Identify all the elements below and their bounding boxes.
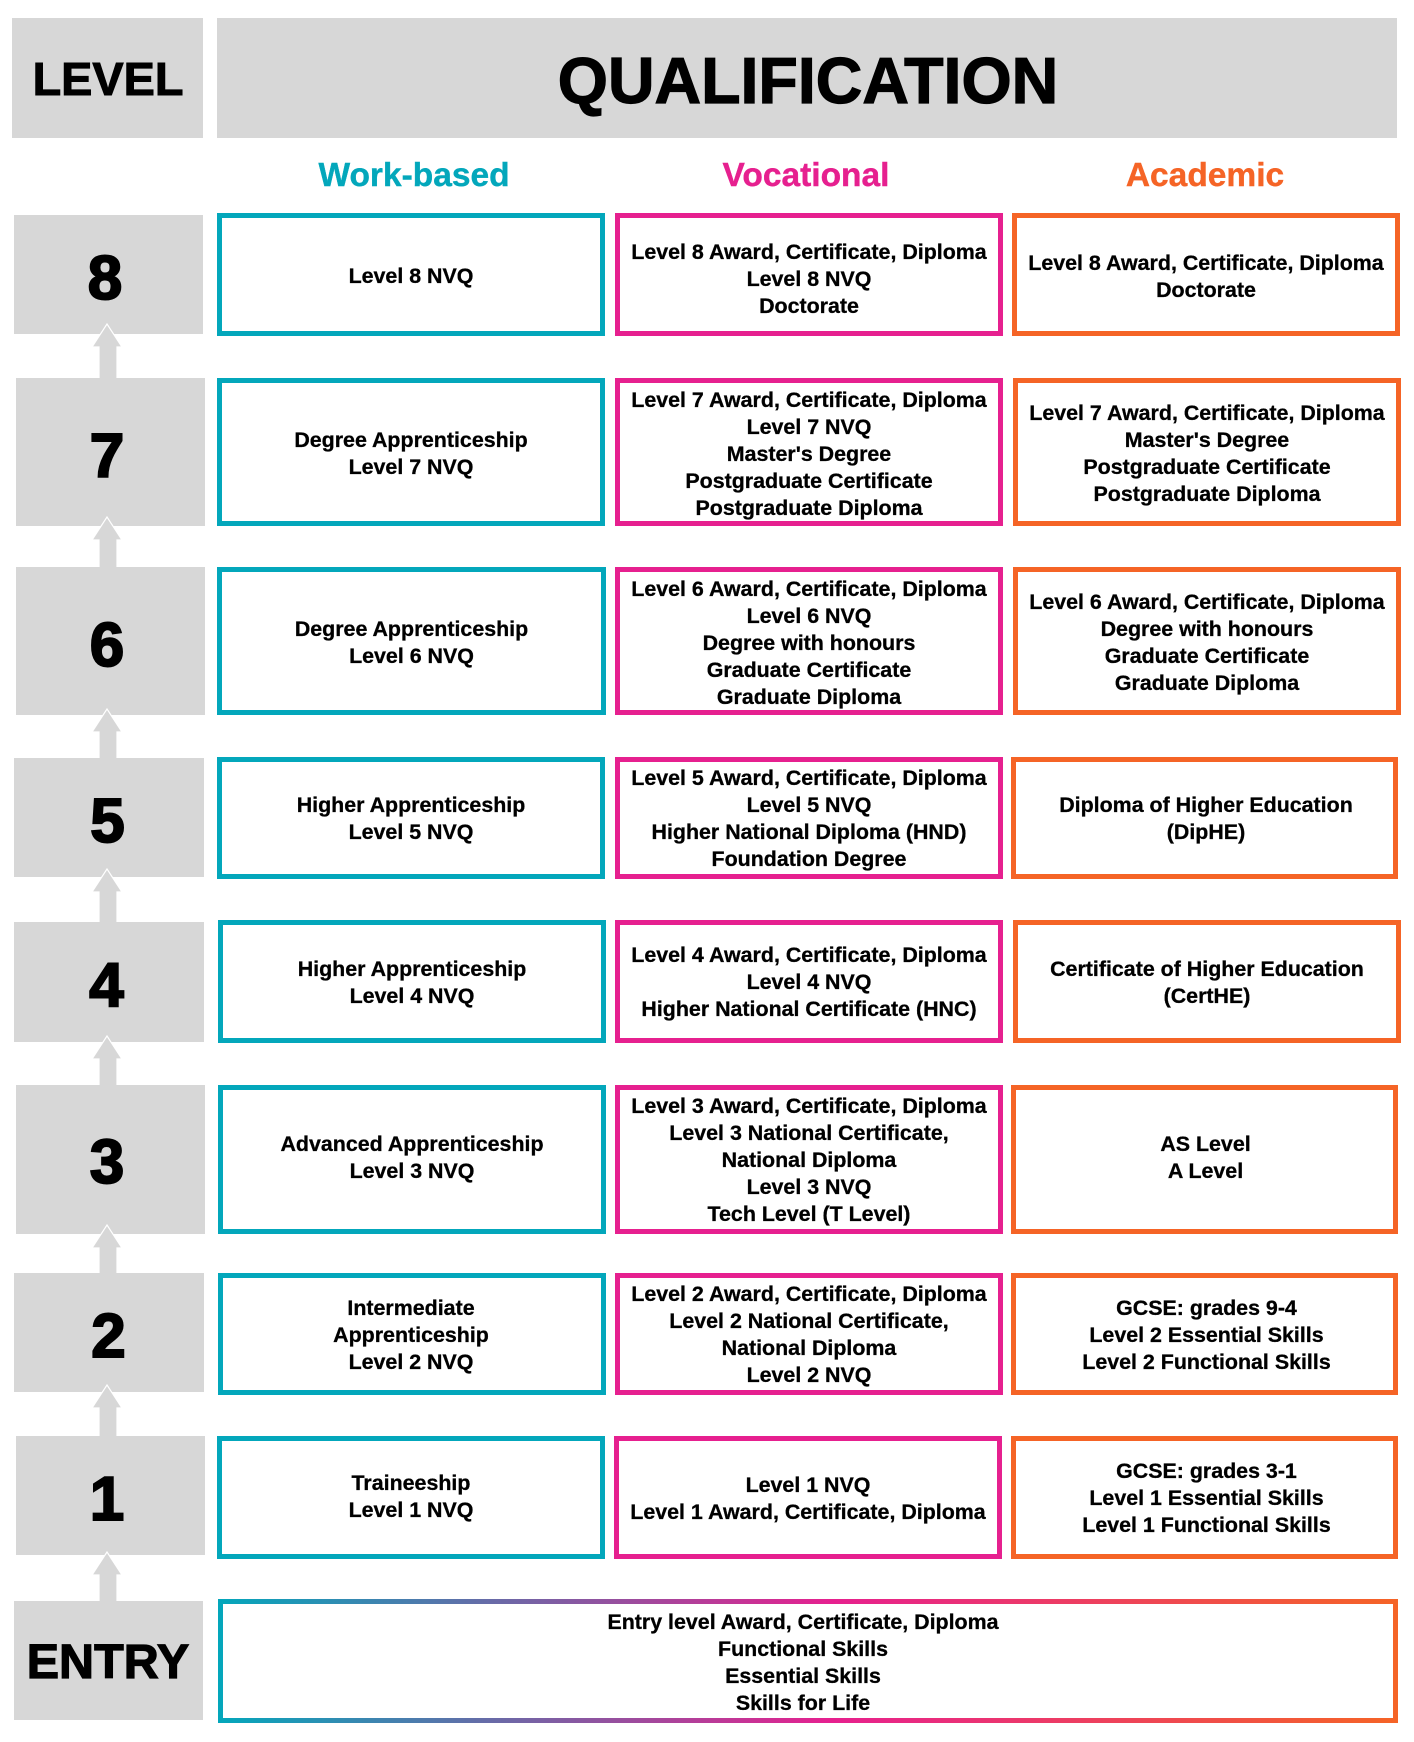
- level 8 vocational: [615, 213, 1003, 336]
- arrow: level 2 to 3: [93, 1224, 121, 1273]
- level 7 vocational: [615, 378, 1003, 526]
- level 7 academic: Level 7 Award, Certificate, Diploma: [1029, 401, 1385, 425]
- level 6 vocational: Graduate Diploma: [717, 684, 901, 708]
- level 4 work-based: Level 4 NVQ: [350, 984, 474, 1008]
- level 3 work-based: [218, 1085, 606, 1234]
- level 7 vocational: Postgraduate Diploma: [695, 496, 922, 520]
- level 2 badge: 2: [91, 1302, 126, 1370]
- level 6 badge: 6: [90, 610, 124, 680]
- level 4 badge: 4: [89, 951, 124, 1020]
- entry level box with gradient border: Functional Skills: [718, 1637, 888, 1661]
- level 1 work-based: Traineeship: [352, 1470, 470, 1494]
- level 2 badge: [14, 1273, 204, 1392]
- level 6 academic: Degree with honours: [1101, 617, 1313, 641]
- level 5 vocational: Foundation Degree: [712, 847, 906, 871]
- level 1 academic: GCSE: grades 3-1: [1116, 1459, 1297, 1483]
- level 6 vocational: Level 6 NVQ: [747, 604, 871, 628]
- column heading: work-based: Work-based: [318, 157, 510, 194]
- level 5 work-based: Level 5 NVQ: [349, 820, 473, 844]
- level 8 academic: Doctorate: [1156, 278, 1256, 302]
- column heading: academic: Academic: [1126, 157, 1284, 194]
- level 3 academic: [1011, 1085, 1398, 1234]
- level 6 vocational: [615, 567, 1003, 715]
- level 3 vocational: [615, 1085, 1003, 1234]
- level 6 vocational: Degree with honours: [703, 630, 915, 654]
- level 3 badge: 3: [90, 1128, 124, 1196]
- level 1 academic: Level 1 Functional Skills: [1082, 1513, 1331, 1537]
- level 2 vocational: Level 2 National Certificate,: [669, 1309, 949, 1333]
- level 6 badge: [16, 567, 205, 715]
- level 4 vocational: [615, 920, 1003, 1043]
- level 7 work-based: Level 7 NVQ: [349, 455, 473, 479]
- level 2 work-based: Intermediate: [347, 1296, 475, 1320]
- level 5 badge: 5: [90, 786, 125, 856]
- arrow: level 3 to 4: [93, 1035, 121, 1085]
- entry level badge: [14, 1601, 203, 1720]
- level 1 work-based: Level 1 NVQ: [349, 1498, 473, 1522]
- level 5 academic: (DipHE): [1167, 820, 1245, 844]
- level 7 academic: Postgraduate Certificate: [1083, 455, 1331, 479]
- level 8 badge: [14, 215, 203, 334]
- entry level box with gradient border: Essential Skills: [725, 1664, 881, 1688]
- level 2 vocational: Level 2 Award, Certificate, Diploma: [631, 1282, 987, 1306]
- level 5 vocational: Higher National Diploma (HND): [652, 820, 966, 844]
- arrow: entry to level 1: [93, 1551, 121, 1601]
- level 6 work-based: Degree Apprenticeship: [295, 617, 528, 641]
- level 8 academic: Level 8 Award, Certificate, Diploma: [1028, 251, 1384, 275]
- arrow: level 6 to 7: [93, 516, 121, 567]
- level 7 academic: Postgraduate Diploma: [1093, 482, 1320, 506]
- level 5 badge: [14, 758, 204, 877]
- level 3 vocational: National Diploma: [722, 1148, 896, 1172]
- level 1 badge: 1: [90, 1464, 124, 1534]
- level 2 vocational: National Diploma: [722, 1336, 896, 1360]
- level 3 badge: [16, 1085, 205, 1234]
- heading: qualification: QUALIFICATION: [558, 45, 1058, 117]
- level 3 work-based: Level 3 NVQ: [350, 1159, 474, 1183]
- level 8 work-based: Level 8 NVQ: [349, 264, 473, 288]
- level 4 badge: [14, 922, 204, 1042]
- level 7 badge: 7: [90, 422, 124, 490]
- level 3 vocational: Level 3 National Certificate,: [669, 1121, 949, 1145]
- level 1 work-based: [217, 1436, 605, 1559]
- level 7 vocational: Level 7 Award, Certificate, Diploma: [631, 388, 987, 412]
- level 3 work-based: Advanced Apprenticeship: [280, 1132, 544, 1156]
- level 8 work-based: [217, 213, 605, 336]
- level 7 badge: [16, 378, 205, 526]
- arrow: level 4 to 5: [93, 868, 121, 922]
- level 8 vocational: Level 8 Award, Certificate, Diploma: [631, 240, 987, 264]
- level 4 academic: (CertHE): [1164, 984, 1250, 1008]
- arrow: level 7 to 8: [93, 323, 121, 378]
- level 6 academic: [1013, 567, 1401, 715]
- level 4 academic: [1013, 920, 1401, 1043]
- level 7 vocational: Level 7 NVQ: [747, 414, 871, 438]
- level 2 academic: [1011, 1273, 1398, 1395]
- level 2 vocational: [615, 1273, 1003, 1395]
- level 3 academic: A Level: [1168, 1159, 1243, 1183]
- arrow: level 1 to 2: [93, 1384, 121, 1436]
- heading: level: LEVEL: [33, 53, 183, 105]
- level 5 work-based: Higher Apprenticeship: [297, 793, 525, 817]
- level 2 work-based: [218, 1273, 606, 1395]
- level 5 academic: [1011, 757, 1398, 879]
- level 5 academic: Diploma of Higher Education: [1059, 793, 1353, 817]
- level 6 academic: Graduate Diploma: [1115, 671, 1299, 695]
- level 8 badge: 8: [88, 244, 122, 313]
- level 6 work-based: [217, 567, 606, 715]
- level 7 vocational: Master's Degree: [727, 442, 891, 466]
- level 4 vocational: Level 4 Award, Certificate, Diploma: [631, 943, 987, 967]
- level 7 vocational: Postgraduate Certificate: [685, 468, 933, 492]
- level 2 academic: Level 2 Essential Skills: [1089, 1322, 1324, 1346]
- level 1 vocational: [614, 1436, 1002, 1559]
- level 5 vocational: [615, 757, 1003, 879]
- level 3 academic: AS Level: [1160, 1132, 1251, 1156]
- level 3 vocational: Level 3 NVQ: [747, 1175, 871, 1199]
- heading: qualification: [217, 18, 1397, 138]
- level 7 work-based: Degree Apprenticeship: [294, 428, 528, 452]
- level 6 academic: Graduate Certificate: [1105, 644, 1309, 668]
- level 1 academic: Level 1 Essential Skills: [1089, 1486, 1324, 1510]
- level 2 academic: Level 2 Functional Skills: [1082, 1350, 1331, 1374]
- entry level box with gradient border: [218, 1599, 1398, 1723]
- level 1 academic: [1011, 1436, 1398, 1559]
- level 5 vocational: Level 5 NVQ: [747, 793, 871, 817]
- level 5 work-based: [217, 757, 605, 879]
- level 4 vocational: Higher National Certificate (HNC): [641, 997, 977, 1021]
- level 4 academic: Certificate of Higher Education: [1050, 956, 1364, 980]
- level 6 academic: Level 6 Award, Certificate, Diploma: [1029, 590, 1385, 614]
- level 1 vocational: Level 1 NVQ: [746, 1472, 870, 1496]
- level 2 academic: GCSE: grades 9-4: [1116, 1296, 1297, 1320]
- column heading: vocational: Vocational: [723, 157, 889, 194]
- level 2 work-based: Level 2 NVQ: [349, 1350, 473, 1374]
- level 4 work-based: Higher Apprenticeship: [298, 956, 526, 980]
- level 8 vocational: Doctorate: [759, 294, 859, 318]
- level 4 vocational: Level 4 NVQ: [747, 970, 871, 994]
- level 4 work-based: [218, 920, 606, 1043]
- level 2 vocational: Level 2 NVQ: [747, 1363, 871, 1387]
- level 6 work-based: Level 6 NVQ: [349, 644, 474, 668]
- level 5 vocational: Level 5 Award, Certificate, Diploma: [631, 766, 987, 790]
- arrow: level 5 to 6: [93, 708, 121, 758]
- level 3 vocational: Tech Level (T Level): [708, 1202, 910, 1226]
- entry level box with gradient border: Skills for Life: [736, 1691, 870, 1715]
- level 7 academic: [1013, 378, 1401, 526]
- heading: level: [12, 18, 203, 138]
- level 2 work-based: Apprenticeship: [333, 1322, 489, 1346]
- level 6 vocational: Graduate Certificate: [707, 658, 911, 682]
- level 8 academic: [1012, 213, 1400, 336]
- level 6 vocational: Level 6 Award, Certificate, Diploma: [631, 576, 987, 600]
- level 1 vocational: Level 1 Award, Certificate, Diploma: [630, 1500, 986, 1524]
- level 7 academic: Master's Degree: [1125, 428, 1289, 452]
- level 7 work-based: [217, 378, 605, 526]
- entry level box with gradient border: Entry level Award, Certificate, Diploma: [607, 1610, 999, 1634]
- level 1 badge: [16, 1436, 205, 1555]
- level 3 vocational: Level 3 Award, Certificate, Diploma: [631, 1094, 987, 1118]
- level 8 vocational: Level 8 NVQ: [747, 266, 871, 290]
- entry level badge: ENTRY: [27, 1635, 189, 1689]
